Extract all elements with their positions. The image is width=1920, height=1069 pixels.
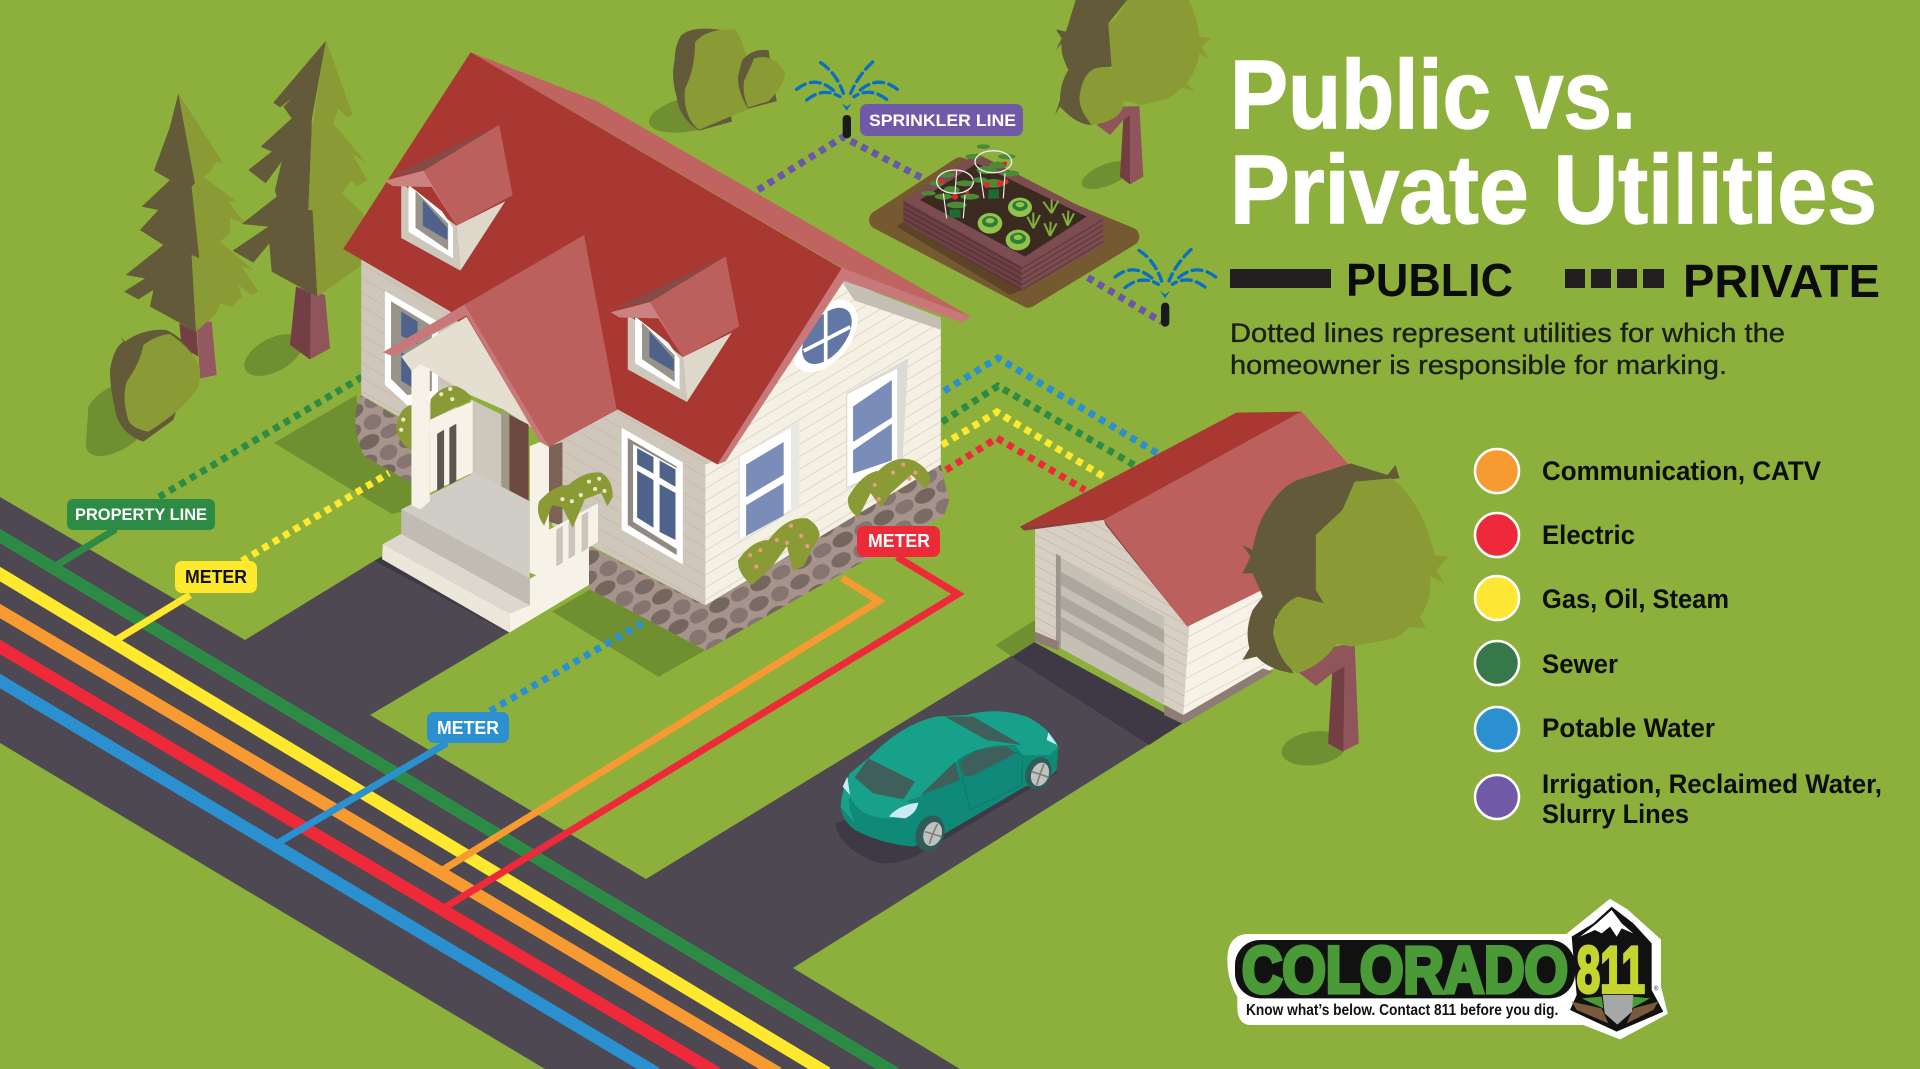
sprinkler one spray [797,62,897,100]
porch gable wall [401,317,532,428]
logo wordmark: COLORADO [1242,933,1568,1007]
pine two light side [308,41,367,297]
door [501,409,562,526]
legend: potable water: Potable Water [1542,713,1715,743]
left light [843,777,850,795]
label: red meter [857,526,940,557]
shrub front door [538,472,613,528]
soil [920,163,1087,257]
label: property line [67,499,215,530]
side window front [959,747,1016,777]
bed right side [1022,218,1103,291]
garage driveway shadow [1012,642,1183,745]
rear light [889,803,918,818]
porch right railing [549,503,598,571]
top bushes [646,29,785,140]
dormer right window [635,316,680,390]
public line: water blue [0,678,656,1069]
legend: irrigation [1475,769,1882,829]
logo soil [1572,1002,1608,1023]
private label: PRIVATE [1683,255,1880,307]
dormer right shade [616,256,726,308]
dormer right [611,256,739,402]
public utility lines in road [0,533,895,1069]
dormer left roof [424,125,513,226]
shrub porch rear [396,386,472,450]
description line two: homeowner is responsible for marking. [1230,350,1727,380]
step side [509,546,589,633]
right tree canopy dark [1242,463,1400,673]
dormer right roof [650,256,739,357]
porch steps [382,473,589,633]
canopy light [1108,0,1211,105]
big bush light [685,30,752,130]
dormer left wall [401,183,460,271]
garage roof back plane [1020,412,1302,527]
gable edge trim [718,268,971,464]
legend: communication [1475,449,1821,493]
logo number: 811 [1577,933,1645,1007]
legend: irrigation: Irrigation, Reclaimed Water, [1542,769,1882,799]
dormer left side [456,201,505,271]
cabbages [978,198,1032,250]
house [343,52,971,651]
dotted green to garage [942,386,1134,465]
foundation front [589,546,705,650]
left side wall [361,256,462,448]
garage [996,412,1449,770]
round window [779,288,870,384]
right wall window two [846,358,908,489]
right tree canopy light [1316,478,1449,647]
dormer left [384,125,513,271]
right side wall [705,277,941,605]
legend: sewer: Sewer [1542,649,1618,679]
front wheel [1021,753,1056,793]
Colorado 811 logo [1228,900,1667,1038]
garage side shadow [996,620,1035,657]
dotted blue to house front [490,621,646,711]
sprinkler one head [843,115,851,138]
logo soil right [1627,1002,1658,1023]
right tree trunk [1298,643,1359,752]
sprinkler one [797,62,897,138]
utility colour legend [1475,449,1882,829]
bush light side [125,334,200,432]
bed shadow [897,222,1022,295]
label: property line: PROPERTY LINE [75,505,207,524]
lower tread [383,534,530,613]
lower riser [382,544,509,633]
right wall window one [738,422,799,540]
raised garden bed [878,144,1130,298]
garage right wall [1179,577,1277,715]
pine two trunk [290,287,330,359]
left pine trees and bush [86,41,367,456]
porch left post [411,364,430,509]
canopy small lobe [1079,67,1124,125]
tomato plants [921,144,1019,218]
title line one: Public vs. [1230,40,1636,149]
right tree shadow [1278,726,1350,770]
logo registered mark: ® [1654,986,1659,993]
shrub right wall lower [738,518,820,585]
logo leaves [1582,997,1603,1008]
label: yellow meter: METER [185,567,247,587]
pine one light side [178,93,258,332]
big bush dark [673,29,732,131]
top right tree [1055,0,1211,195]
foundation right [705,464,949,651]
logo black band [1235,940,1575,998]
garage foundations [1035,632,1273,724]
public label: PUBLIC [1346,254,1513,306]
shrub right wall upper [848,459,931,518]
porch back wall [471,399,503,493]
dormer right side [683,333,732,402]
front window [622,428,683,564]
porch driveway shadow [374,553,522,633]
right light [1047,732,1057,745]
label: yellow meter [175,561,257,593]
pine one trunk [179,322,217,378]
roof main plane [343,52,842,464]
label: red meter: METER [868,531,930,551]
pine two dark side [233,41,326,297]
bush dark side [110,330,193,442]
sprinkler two nozzle [1160,291,1170,298]
foundation left [355,395,411,483]
branch: orange [441,578,879,871]
bed rim [903,153,1103,267]
label: blue meter: METER [437,718,499,738]
windshield [945,717,1022,745]
logo snow cap [1580,910,1633,937]
porch right post [530,442,549,577]
dotted red to garage [946,438,1085,490]
porch floor [401,473,530,579]
legend: gas: Gas, Oil, Steam [1542,584,1729,614]
car shadow [835,753,1057,863]
dormer left eave [384,171,456,226]
sprinkler one nozzle [842,103,852,111]
legend: potable water [1475,707,1715,751]
private dashed line sample [1565,269,1664,288]
pine one dark side [124,93,199,332]
logo tagline: Know what’s below. Contact 811 before you dig. [1246,1002,1558,1019]
legend: gas [1475,576,1729,620]
legend: irrigation: Slurry Lines [1542,799,1689,829]
plant two [965,144,1019,199]
roof right trim [471,52,971,322]
porch rear railing [430,401,473,493]
legend: electric: Electric [1542,520,1635,550]
car [835,711,1058,863]
onions [1027,199,1074,236]
car side body [841,711,1058,847]
garage door [1056,553,1164,705]
left window [385,291,438,405]
branch: red meter [444,557,958,908]
garage front wall [1035,518,1189,715]
legend: sewer [1475,641,1618,685]
rear window [855,758,915,799]
legend: electric [1475,513,1635,557]
shadow front of house [552,589,705,677]
description text [1230,318,1785,380]
public service branch lines [52,529,958,908]
rear wheel [911,811,949,855]
dotted green to house [159,377,362,497]
small bush light [744,57,785,107]
legend: communication: Communication, CATV [1542,456,1821,486]
bush shadow [646,87,741,140]
public line: electric red [0,644,717,1069]
branch: yellow meter [116,595,190,640]
logo black badge [1570,907,1663,1032]
sprinkler two spray [1115,250,1216,288]
dormer left window [409,185,453,258]
front gable trim [383,304,549,447]
front wall [552,399,718,605]
road and driveways [0,497,1183,1069]
house ground shadows [274,395,705,677]
sprinkler two [1115,250,1216,327]
soil patch [878,167,1130,298]
logo leaves right [1632,997,1650,1008]
dotted yellow to garage [942,412,1106,478]
dormer left shade [389,125,499,177]
right tree small lobe [1273,597,1339,673]
description line one: Dotted lines represent utilities for which the [1230,318,1785,348]
dormer right eave [611,302,683,357]
dotted blue to garage [944,358,1157,453]
tree shadow [238,325,309,385]
bed left side [903,200,1022,291]
public line: gas yellow [0,571,827,1069]
title line two: Private Utilities [1230,135,1877,244]
trunk [1097,106,1143,184]
dotted yellow to house [242,473,389,561]
title [1230,40,1877,244]
canopy dark [1055,0,1130,125]
plant one [921,170,979,218]
tree shadow [1078,155,1135,195]
logo white sticker [1228,900,1667,1038]
label: blue meter [427,712,509,743]
private dotted lines [159,137,1162,711]
sprinklers [797,62,1216,327]
garage roof front plane [1104,412,1351,627]
logo shovel [1603,995,1633,1025]
garage roof rake [1104,520,1187,627]
shadow left of house [274,395,411,514]
label: sprinkler line [860,104,1023,136]
public line: communication orange [0,608,778,1069]
dotted purple sprinkler line two [1067,265,1162,322]
branch: blue meter [276,743,447,844]
garage roof eave [1020,520,1104,531]
dotted purple sprinkler line one [758,137,928,190]
upper riser [401,509,530,605]
label: sprinkler line: SPRINKLER LINE [869,111,1016,130]
gable soffit [840,279,941,330]
public line: sewer green [0,533,895,1069]
dormer right wall [628,314,687,402]
line style key [1230,254,1880,307]
small bush dark [738,50,777,109]
sprinkler two head [1161,303,1169,327]
side window rear [921,762,960,795]
public solid line sample [1230,269,1331,288]
branch: property line [52,529,116,568]
front gable [464,235,617,447]
bush shadow [86,387,137,456]
car top body [841,711,1058,823]
car door [958,749,1023,810]
